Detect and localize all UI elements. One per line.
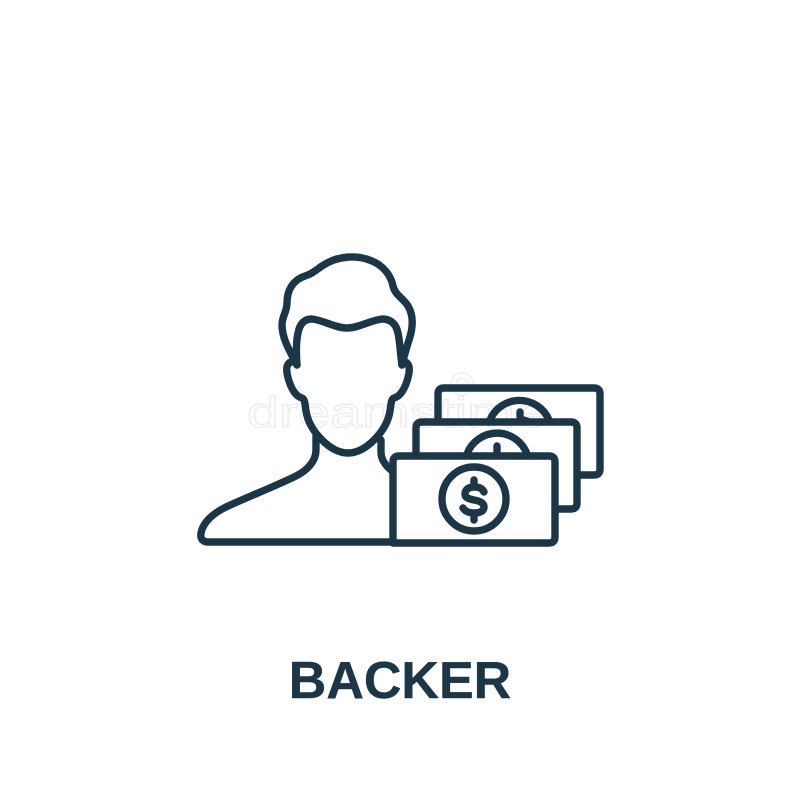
watermark: dreamstime — [247, 389, 547, 437]
icon: backer person with money — [201, 257, 600, 543]
icon: hairline — [296, 319, 402, 365]
icon: back banknote — [438, 388, 600, 475]
icon: dollar coin — [442, 467, 506, 531]
watermark — [247, 373, 547, 437]
icon: dollar sign — [463, 480, 484, 520]
icon: shoulders and neck — [201, 436, 393, 542]
icon: face and ears — [287, 362, 409, 453]
icon: front banknote — [393, 456, 555, 543]
icon: middle banknote — [416, 422, 577, 509]
title: BACKER — [289, 652, 511, 710]
icon: hair outline — [282, 257, 412, 365]
icon: right neck — [381, 440, 391, 470]
